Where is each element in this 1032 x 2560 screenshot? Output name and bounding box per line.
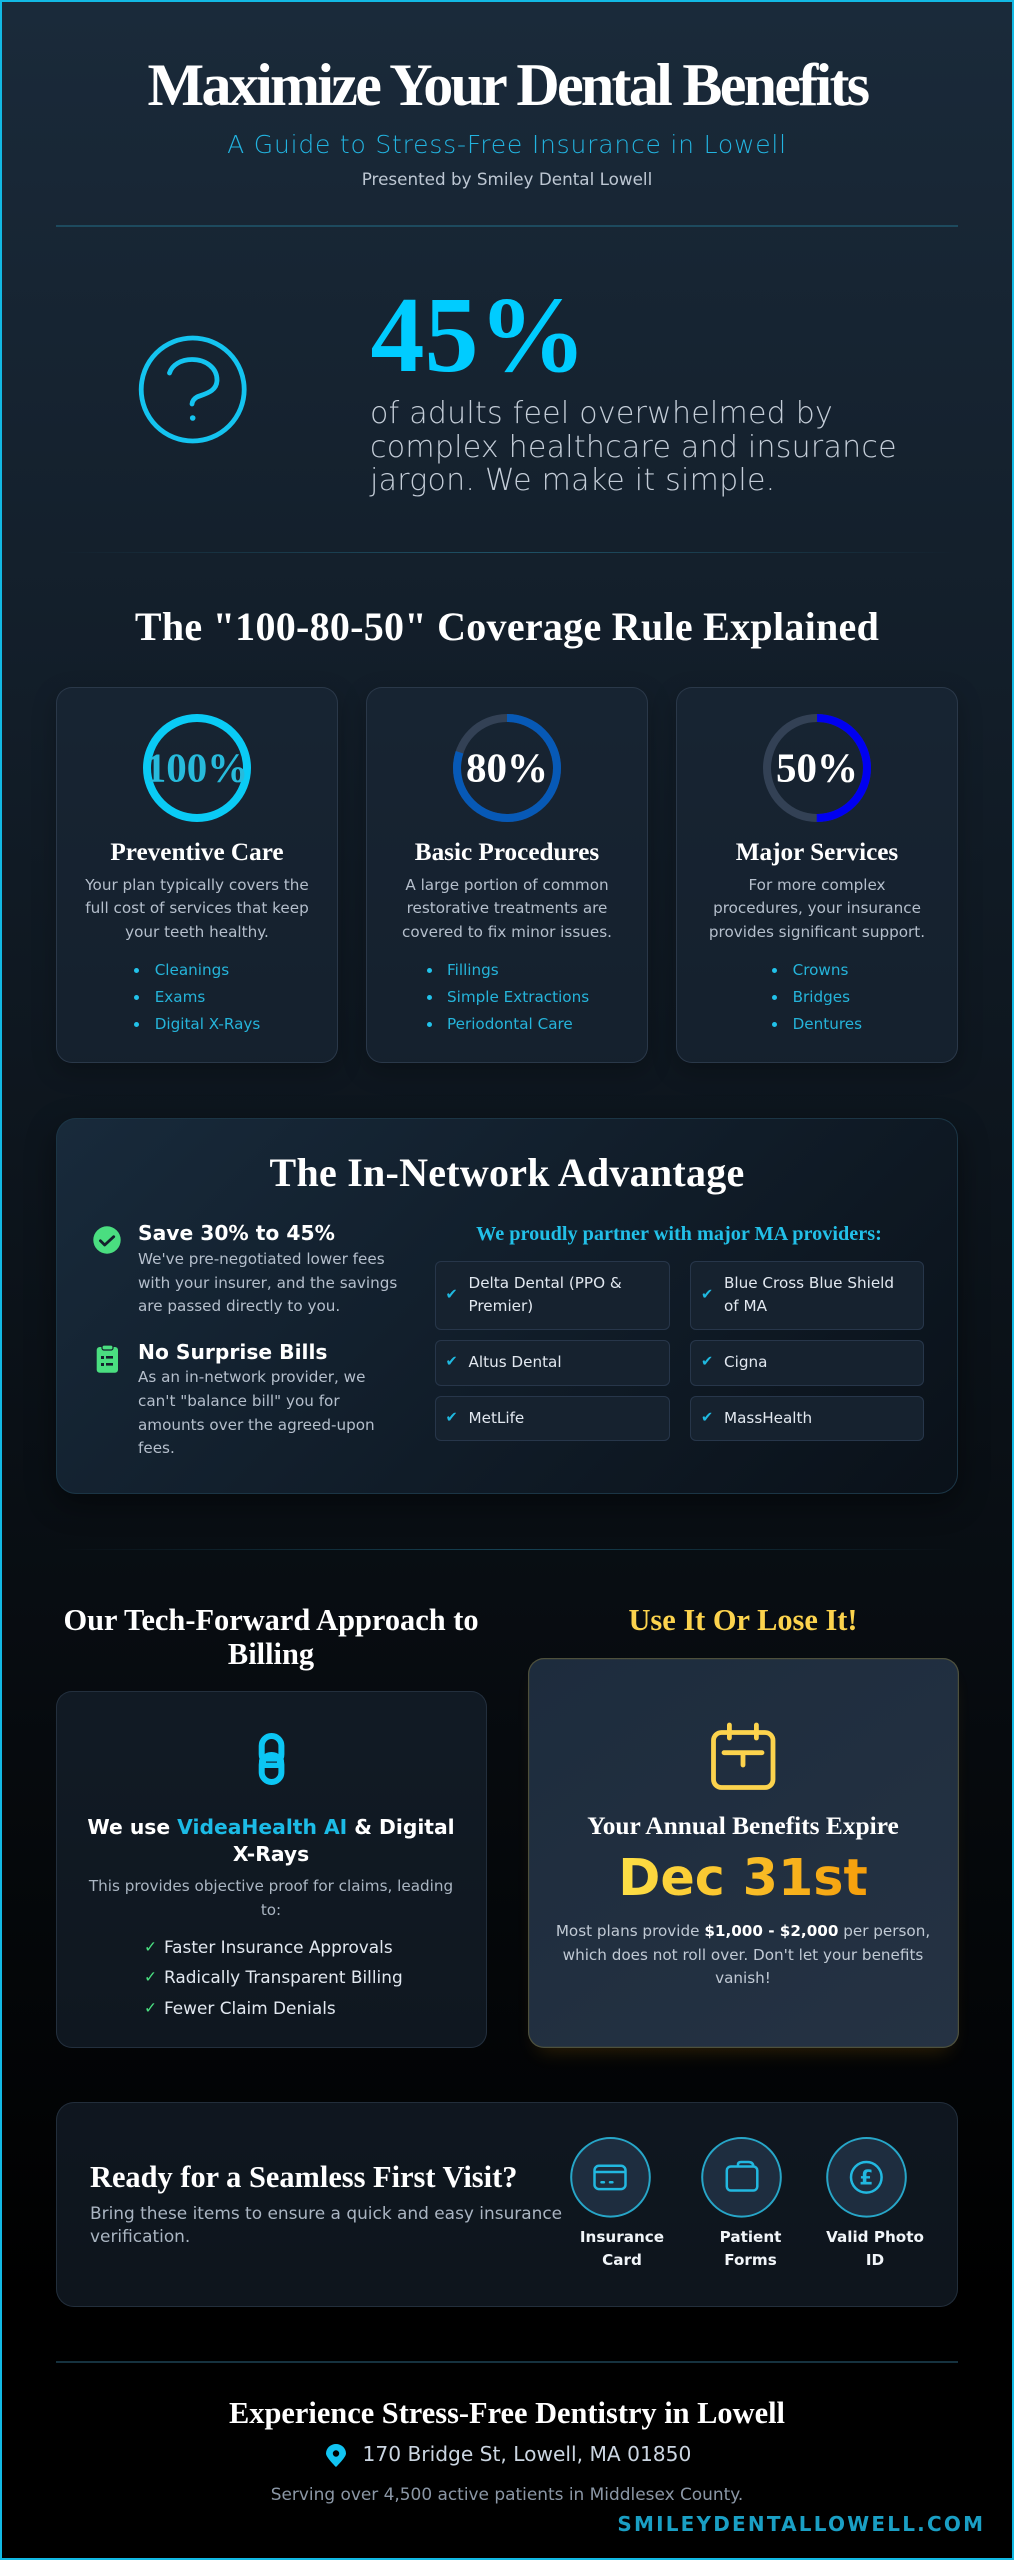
ring chart: 50 percent: 50% (776, 744, 858, 790)
benefit: save (93, 1221, 397, 1315)
title: Maximize Your Dental Benefits (148, 52, 867, 118)
icon: card (570, 2137, 651, 2218)
item label: Insurance (580, 2228, 664, 2246)
item label: Forms (724, 2251, 777, 2269)
service list: Exams (155, 988, 205, 1006)
panel: tech billing: ✓ (144, 1999, 157, 2017)
panel: basic procedures (366, 687, 648, 1063)
heading: tech approach: Our Tech-Forward Approach to (63, 1603, 479, 1637)
provider: altus: Altus Dental (468, 1353, 562, 1371)
icon: calendar (711, 1722, 776, 1790)
benefit list: Radically Transparent Billing (164, 1967, 403, 1987)
icon: chain link (258, 1733, 284, 1785)
card description: your teeth healthy. (125, 923, 269, 941)
tech description: to: (261, 1901, 281, 1919)
website: SMILEYDENTALLOWELL.COM (617, 2512, 985, 2536)
tech heading text: We use VideaHealth AI & Digital (87, 1814, 455, 1838)
card description: restorative treatments are (407, 899, 607, 917)
footer heading: Experience Stress-Free Dentistry in Lowell (229, 2396, 785, 2430)
item label: Valid Photo (826, 2228, 924, 2246)
provider: blue cross: ✔ (701, 1287, 713, 1303)
stat description: complex healthcare and insurance (370, 430, 897, 464)
ring chart: 100 percent: 100% (146, 744, 248, 790)
item label: Patient (720, 2228, 781, 2246)
card title: Preventive Care (110, 838, 284, 866)
item label (720, 2228, 782, 2269)
expiry date: Dec 31st (618, 1848, 868, 1907)
section heading: coverage rule: The "100-80-50" Coverage Rule Explained (135, 604, 879, 648)
item: insurance card (570, 2137, 664, 2269)
benefit text: can't "balance bill" you for (138, 1392, 340, 1410)
presenter line: Presented by Smiley Dental Lowell (362, 169, 652, 189)
icon: location pin (326, 2444, 346, 2467)
icon: question mark circle (138, 336, 247, 444)
stat description (369, 396, 897, 498)
expiry description: Most plans provide $1,000 - $2,000 per person, (556, 1922, 930, 1940)
service list (772, 961, 862, 1033)
tech description (88, 1877, 453, 1919)
provider: delta dental: ✔ (446, 1287, 458, 1303)
benefit text: As an in-network provider, we (138, 1368, 365, 1386)
ring chart: 100 percent (143, 714, 251, 822)
item: patient forms (701, 2137, 782, 2269)
benefit text: fees. (138, 1439, 175, 1457)
provider: blue cross: of MA (724, 1297, 767, 1315)
provider: cigna (690, 1340, 924, 1386)
panel: first visit checklist (56, 2102, 958, 2307)
provider: altus: ✔ (446, 1354, 458, 1370)
provider: delta dental (434, 1261, 670, 1330)
expiry description: vanish! (715, 1969, 771, 1987)
provider: cigna: ✔ (701, 1354, 713, 1370)
panel: major services (676, 687, 958, 1063)
heading: use it or lose it: Use It Or Lose It! (628, 1603, 858, 1637)
benefit list: Faster Insurance Approvals (164, 1937, 393, 1957)
card description: procedures, your insurance (713, 899, 921, 917)
card description: A large portion of common (405, 876, 609, 894)
card description: provides significant support. (709, 923, 925, 941)
service list (427, 961, 589, 1033)
service list: Simple Extractions (447, 988, 589, 1006)
provider: blue cross: Blue Cross Blue Shield (724, 1274, 894, 1292)
item label: ID (866, 2251, 884, 2269)
item: valid photo id (826, 2137, 924, 2269)
benefit text (138, 1340, 375, 1457)
benefit text: are passed directly to you. (138, 1297, 340, 1315)
icon: pound coin: £ (859, 2165, 873, 2189)
panel: annual benefits expire (528, 1658, 958, 2048)
first visit description (90, 2203, 562, 2246)
provider: delta dental: Delta Dental (PPO & (468, 1274, 622, 1292)
benefit text: amounts over the agreed-upon (138, 1416, 375, 1434)
benefit text: Save 30% to 45% (138, 1221, 335, 1245)
provider: blue cross (690, 1261, 924, 1330)
benefit text: with your insurer, and the savings (138, 1274, 397, 1292)
card description: For more complex (748, 876, 886, 894)
address: 170 Bridge St, Lowell, MA 01850 (362, 2442, 691, 2466)
card title: Major Services (736, 838, 898, 866)
stat description: jargon. We make it simple. (370, 463, 775, 498)
stat description: of adults feel overwhelmed by (370, 396, 833, 431)
panel: tech billing: ✓ (144, 1968, 157, 1986)
provider: metlife (434, 1396, 670, 1441)
card description (85, 876, 309, 941)
provider: metlife: ✔ (446, 1410, 458, 1426)
service list: Bridges (793, 988, 850, 1006)
item label: Card (602, 2251, 642, 2269)
expiry description: which does not roll over. Don't let your benefits (563, 1946, 923, 1964)
first visit heading: Ready for a Seamless First Visit? (90, 2160, 517, 2194)
expiry heading: Your Annual Benefits Expire (587, 1812, 899, 1840)
providers heading: We proudly partner with major MA providers: (476, 1223, 882, 1245)
service list (134, 961, 260, 1033)
card description: full cost of services that keep (85, 899, 309, 917)
benefit text (138, 1221, 397, 1315)
expiry description (556, 1922, 930, 1987)
tech heading text: X-Rays (233, 1842, 309, 1866)
patients served line: Serving over 4,500 active patients in Middlesex County. (271, 2484, 743, 2504)
provider: delta dental: Premier) (468, 1297, 533, 1315)
ring chart: 80 percent: 80% (466, 744, 548, 790)
benefit list: Fewer Claim Denials (164, 1998, 336, 2018)
provider: masshealth: MassHealth (724, 1409, 812, 1427)
icon: check circle (93, 1226, 121, 1254)
first visit description: Bring these items to ensure a quick and easy insurance (90, 2203, 562, 2223)
card description: covered to fix minor issues. (402, 923, 612, 941)
provider: masshealth: ✔ (701, 1410, 713, 1426)
icon: folder (701, 2137, 782, 2218)
ring chart: 50 percent (763, 714, 871, 822)
heading: tech approach: Billing (228, 1637, 314, 1671)
benefit: no surprise bills (96, 1340, 375, 1457)
benefit list (144, 1937, 403, 2018)
subtitle: A Guide to Stress-Free Insurance in Lowell (227, 130, 787, 159)
benefit text: No Surprise Bills (138, 1340, 327, 1364)
panel: tech billing: ✓ (144, 1938, 157, 1956)
item label (826, 2228, 924, 2269)
heading: tech approach (63, 1603, 479, 1671)
card description (402, 876, 612, 941)
card description (709, 876, 925, 941)
service list: Periodontal Care (447, 1015, 573, 1033)
icon: clipboard (96, 1346, 118, 1373)
benefit text: We've pre-negotiated lower fees (138, 1250, 385, 1268)
service list: Fillings (447, 961, 499, 979)
item label (580, 2228, 664, 2269)
panel: tech billing (56, 1691, 486, 2048)
card description: Your plan typically covers the (85, 876, 309, 894)
first visit description: verification. (90, 2226, 190, 2246)
service list: Digital X-Rays (155, 1015, 260, 1033)
ring chart: 80 percent (453, 714, 561, 822)
panel heading: The In-Network Advantage (270, 1150, 744, 1194)
icon: pound coin (826, 2137, 907, 2218)
stat number: 45% (370, 276, 586, 394)
provider: cigna: Cigna (724, 1353, 767, 1371)
provider: masshealth (690, 1396, 924, 1441)
card title: Basic Procedures (415, 838, 599, 866)
tech description: This provides objective proof for claims, leading (89, 1877, 453, 1895)
tech heading text (87, 1814, 455, 1866)
provider: metlife: MetLife (468, 1409, 524, 1427)
service list: Cleanings (155, 961, 229, 979)
provider: altus (434, 1340, 670, 1386)
panel: preventive care (56, 687, 338, 1063)
service list: Dentures (793, 1015, 862, 1033)
service list: Crowns (793, 961, 848, 979)
panel: in-network advantage (56, 1118, 958, 1494)
